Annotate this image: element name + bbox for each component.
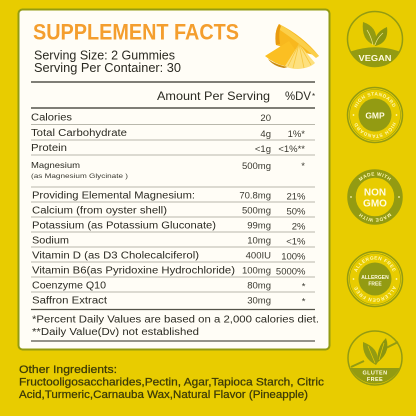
nutrition table rows: 100%	[281, 252, 306, 262]
icon: non-GMO badge	[347, 169, 403, 225]
nutrition table rows	[31, 112, 315, 310]
serving information: Serving Per Container: 30	[34, 61, 181, 75]
nutrition table rows: Potassium (as Potassium Gluconate)	[32, 220, 216, 232]
curved label	[354, 92, 396, 138]
other ingredients text: Fructooligosaccharides,Pectin, Agar,Tapioca Starch, Citric	[19, 376, 325, 388]
badge label: VEGAN	[358, 53, 392, 63]
table header: Amount Per Serving	[157, 89, 270, 103]
other ingredients text: Acid,Turmeric,Carnauba Wax,Natural Flavor (Pineapple)	[19, 389, 308, 401]
curved label: HIGH STANDARD	[354, 122, 396, 138]
nutrition table rows: 30mg	[247, 296, 271, 306]
icon: gluten free badge	[348, 331, 402, 385]
icon: gluten free badge: FREE	[367, 377, 383, 383]
nutrition table rows: Vitamin B6(as Pyridoxine Hydrochloride)	[32, 266, 235, 276]
curved label: ALLERGEN FREE	[354, 256, 396, 272]
nutrition table rows: *	[302, 296, 306, 308]
curved label: HIGH STANDARD	[354, 92, 396, 108]
icon: allergen free badge	[346, 250, 404, 308]
icon: GMP badge: GMP	[365, 110, 385, 120]
nutrition table rows: 1%*	[288, 129, 305, 140]
nutrition table rows: *	[301, 161, 305, 172]
curved label: MADE WITH	[358, 213, 392, 222]
nutrition table rows: Sodium	[32, 236, 69, 246]
icon: GMP badge	[346, 86, 404, 144]
curved label	[354, 256, 396, 302]
table header: *	[312, 92, 315, 101]
curved label: ALLERGEN FREE	[354, 286, 396, 302]
nutrition table rows: 5000%	[276, 266, 306, 278]
icon: allergen free badge: ALLERGEN	[361, 275, 389, 281]
nutrition table rows: 400IU	[246, 250, 271, 262]
table header: %DV	[285, 89, 311, 103]
nutrition table rows: Vitamin D (as D3 Cholecalciferol)	[32, 250, 199, 262]
nutrition table rows: 500mg	[242, 206, 271, 216]
nutrition table rows: 2%	[292, 222, 306, 232]
curved label	[358, 172, 392, 222]
panel: supplement facts card	[18, 10, 330, 350]
icon: allergen free badge: FREE	[368, 282, 382, 288]
other ingredients text: Other Ingredients:	[19, 364, 117, 376]
nutrition table rows: Calories	[31, 112, 72, 124]
nutrition table rows: Providing Elemental Magnesium:	[32, 190, 195, 202]
nutrition table rows: 100mg	[242, 266, 271, 276]
nutrition table rows: 4g	[260, 129, 271, 140]
nutrition table rows: Magnesium	[31, 160, 80, 170]
icon: non-GMO badge: NON	[364, 188, 386, 198]
badge label: GLUTEN	[362, 370, 388, 376]
nutrition table rows: *	[302, 282, 306, 292]
nutrition table rows: Coenzyme Q10	[32, 280, 106, 292]
nutrition table rows: Saffron Extract	[32, 296, 107, 306]
curved label: MADE WITH	[358, 172, 392, 181]
nutrition table rows: <1%	[286, 236, 306, 248]
nutrition table rows: 99mg	[247, 220, 271, 232]
nutrition table rows: 50%	[286, 206, 306, 218]
footnotes	[31, 314, 319, 341]
serving information: Serving Size: 2 Gummies	[34, 48, 175, 62]
serving information	[34, 48, 181, 75]
nutrition table rows: 80mg	[247, 280, 271, 292]
icon: pineapple slices	[265, 24, 319, 69]
other ingredients text	[19, 364, 325, 401]
footnotes: *Percent Daily Values are based on a 2,000 calories diet.	[32, 314, 319, 326]
nutrition table rows: Total Carbohydrate	[31, 128, 127, 139]
nutrition table rows: 21%	[286, 192, 306, 202]
table header	[31, 82, 315, 108]
title: SUPPLEMENT FACTS	[33, 20, 239, 44]
nutrition table rows: 500mg	[242, 161, 271, 172]
nutrition table rows: Protein	[31, 143, 67, 154]
footnotes: **Daily Value(Dv) not established	[32, 327, 199, 338]
nutrition table rows: 10mg	[247, 236, 271, 246]
nutrition table rows: <1g	[255, 144, 271, 155]
nutrition table rows: Calcium (from oyster shell)	[32, 206, 167, 216]
nutrition table rows: <1%**	[278, 144, 305, 155]
icon: vegan badge	[348, 12, 402, 67]
nutrition table rows: 70.8mg	[239, 190, 271, 202]
nutrition table rows: 20	[260, 113, 271, 124]
nutrition table rows: (as Magnesium Glycinate )	[31, 173, 128, 180]
icon: non-GMO badge: GMO	[363, 198, 387, 210]
